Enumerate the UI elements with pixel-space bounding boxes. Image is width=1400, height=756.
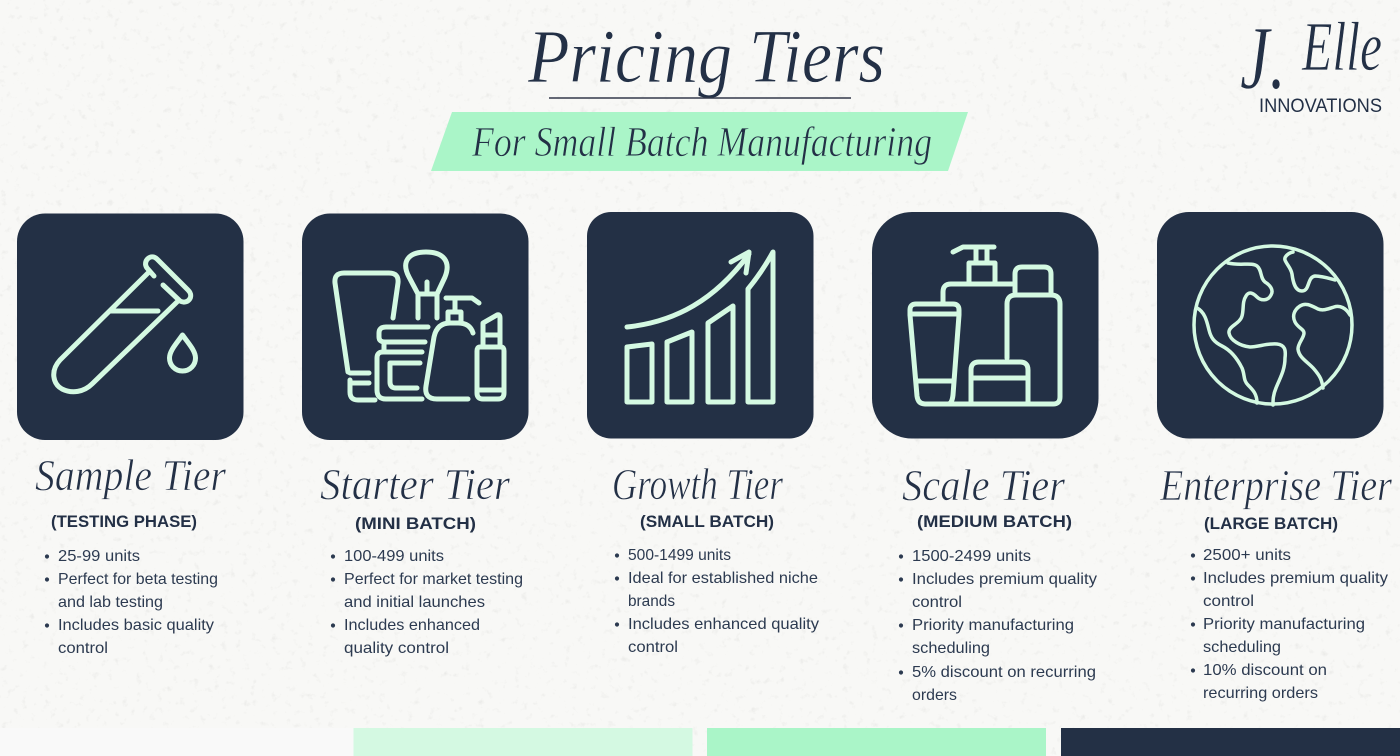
feature list: Includes premium quality <box>1203 570 1388 587</box>
feature list: Includes enhanced quality <box>628 616 819 633</box>
batch label: (TESTING PHASE) <box>51 512 197 531</box>
feature list: scheduling <box>1203 639 1281 656</box>
feature list: 10% discount on <box>1203 662 1327 679</box>
feature list: control <box>628 639 678 656</box>
feature list <box>331 548 523 657</box>
tier name: Starter Tier <box>320 460 511 509</box>
feature list: 500-1499 units <box>628 547 731 564</box>
feature list: Priority manufacturing <box>1203 616 1365 633</box>
subtitle banner <box>431 112 968 171</box>
feature list: Includes enhanced <box>344 617 480 634</box>
tier name: Growth Tier <box>612 460 784 509</box>
feature list: recurring orders <box>1203 685 1318 702</box>
panel: enterprise tier <box>1157 212 1393 702</box>
feature list: 1500-2499 units <box>912 548 1031 565</box>
batch label: (LARGE BATCH) <box>1204 514 1338 533</box>
title: Pricing Tiers <box>527 15 885 99</box>
feature list <box>899 548 1097 704</box>
feature list <box>45 548 218 657</box>
batch label: (SMALL BATCH) <box>640 512 774 531</box>
batch label: (MEDIUM BATCH) <box>917 512 1072 531</box>
feature list: Ideal for established niche <box>628 570 818 587</box>
feature list: Priority manufacturing <box>912 617 1074 634</box>
feature list: and initial launches <box>344 594 485 611</box>
feature list: Includes basic quality <box>58 617 214 634</box>
feature list: and lab testing <box>58 594 163 611</box>
panel: growth tier <box>587 212 819 656</box>
feature list: Includes premium quality <box>912 571 1097 588</box>
tier name: Scale Tier <box>902 461 1066 510</box>
logo <box>1240 9 1382 117</box>
icon: cosmetics <box>302 214 528 440</box>
panel: scale tier <box>872 212 1098 704</box>
logo: J. <box>1240 9 1286 108</box>
logo: INNOVATIONS <box>1259 96 1382 117</box>
feature list: control <box>1203 593 1254 610</box>
feature list <box>1191 547 1388 702</box>
subtitle banner: For Small Batch Manufacturing <box>471 120 932 166</box>
panel: sample tier <box>17 214 244 657</box>
tier name: Sample Tier <box>35 451 227 500</box>
feature list: 5% discount on recurring <box>912 664 1096 681</box>
feature list: scheduling <box>912 640 990 657</box>
feature list: Perfect for beta testing <box>58 571 218 588</box>
footer colour bands <box>0 728 1400 756</box>
feature list: control <box>58 640 108 657</box>
feature list: brands <box>628 593 675 610</box>
feature list: Perfect for market testing <box>344 571 523 588</box>
icon: bottles <box>872 212 1098 438</box>
feature list: 100-499 units <box>344 548 444 565</box>
feature list: orders <box>912 687 957 704</box>
feature list: 2500+ units <box>1203 547 1291 564</box>
feature list: quality control <box>344 640 449 657</box>
feature list: 25-99 units <box>58 548 140 565</box>
feature list: control <box>912 594 962 611</box>
icon: test tube <box>17 214 244 440</box>
batch label: (MINI BATCH) <box>355 514 476 533</box>
icon: globe <box>1157 212 1384 438</box>
feature list <box>615 547 819 656</box>
panel: starter tier <box>302 214 528 657</box>
icon: growth chart <box>587 212 814 438</box>
